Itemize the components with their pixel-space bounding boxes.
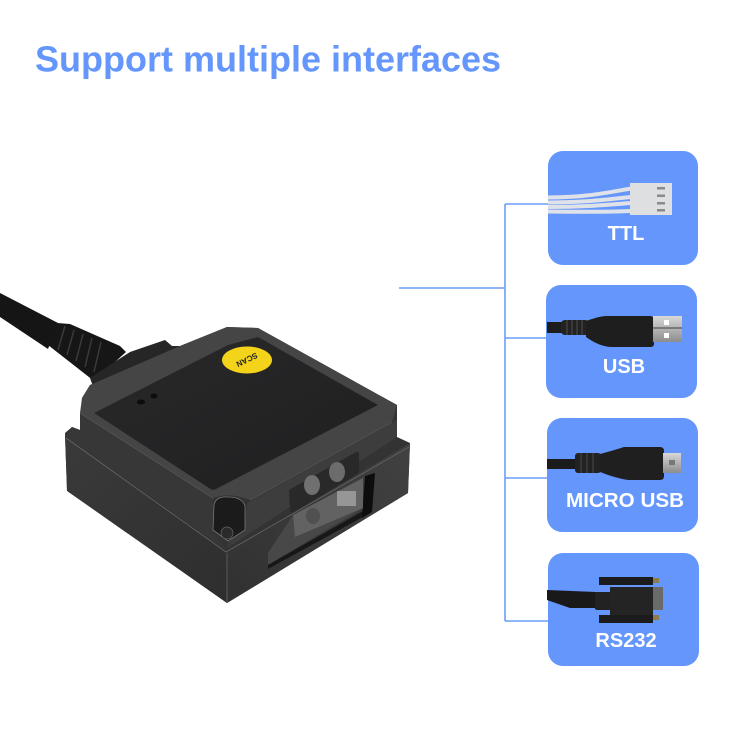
icon: TTL wires and connector bbox=[548, 183, 672, 215]
lower left face bbox=[65, 436, 227, 603]
label: TTL: TTL bbox=[608, 223, 644, 245]
icon: RS232 plug bbox=[547, 577, 663, 623]
button: SCAN: SCAN bbox=[234, 351, 259, 369]
indicator lights bbox=[137, 394, 158, 404]
upper left face bbox=[65, 413, 226, 550]
panel: MICRO USB bbox=[547, 418, 698, 532]
cable bbox=[0, 293, 185, 392]
label: USB: USB bbox=[603, 356, 645, 378]
scanner device bbox=[0, 293, 410, 603]
upper right face bbox=[227, 420, 397, 548]
top plate bbox=[94, 337, 378, 490]
panel: RS232 bbox=[547, 553, 699, 666]
edge highlights bbox=[66, 413, 409, 602]
scanning window bbox=[268, 452, 375, 569]
label: MICRO USB: MICRO USB bbox=[566, 490, 684, 512]
title: Support multiple interfaces bbox=[35, 38, 501, 80]
icon: USB plug bbox=[547, 316, 682, 347]
right face bbox=[227, 443, 410, 603]
connector lines bbox=[399, 204, 548, 621]
panel: TTL bbox=[548, 151, 698, 265]
corner screw post bbox=[213, 497, 245, 541]
button: SCAN bbox=[222, 346, 272, 374]
top rim bbox=[80, 327, 397, 500]
icon: micro USB plug bbox=[547, 447, 681, 480]
label: RS232: RS232 bbox=[595, 630, 657, 652]
body silhouette bbox=[65, 327, 410, 603]
panel: USB bbox=[546, 285, 697, 398]
